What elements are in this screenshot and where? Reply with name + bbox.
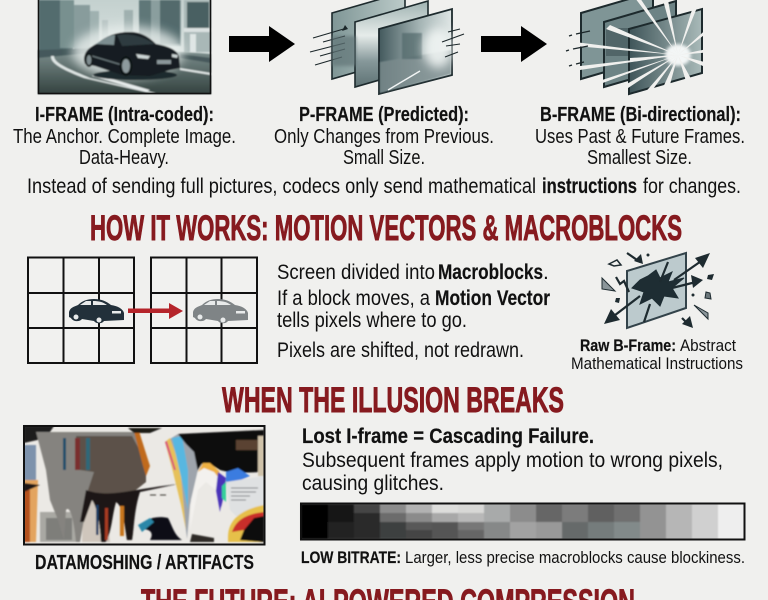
macroblock explanation: Screen divided into (277, 261, 435, 284)
datamoshing glitch image (24, 426, 264, 544)
P-frame caption: P-FRAME (Predicted): (299, 103, 469, 126)
summary line: instructions (542, 175, 637, 198)
low bitrate pixel bar (301, 504, 744, 539)
speed lines (310, 28, 464, 65)
I-frame caption (13, 103, 236, 169)
rainbow spike (165, 434, 198, 539)
summary line: for changes. (643, 175, 741, 198)
illusion breaks explanation: Subsequent frames apply motion to wrong pixels, (302, 449, 723, 472)
shards (575, 0, 712, 96)
macroblock explanation: Pixels are shifted, not redrawn. (277, 339, 524, 362)
P-frame caption (274, 103, 494, 169)
icon: ghost car (193, 299, 248, 323)
P-frame caption: Only Changes from Previous. (274, 125, 494, 148)
summary line: Instead of sending full pictures, codecs only send mathematical (27, 175, 536, 198)
macroblock explanation: If a block moves, a (277, 287, 430, 310)
icon: raw B-frame shatter (602, 253, 714, 328)
top-right black mass (178, 430, 264, 473)
illusion breaks explanation (302, 425, 723, 495)
arrow: motion vector (128, 303, 183, 319)
caption: raw B-frame: Abstract (680, 336, 736, 355)
macroblock grid: after (151, 257, 257, 363)
macroblock explanation (277, 261, 550, 362)
white peak with orange edge (190, 464, 222, 530)
B-frame caption (535, 103, 745, 169)
illusion breaks explanation: Lost I-frame = Cascading Failure. (302, 425, 594, 448)
illusion breaks explanation: causing glitches. (302, 472, 444, 495)
right text-like area (226, 476, 264, 520)
heading: illusion breaks: WHEN THE ILLUSION BREAKS (222, 380, 564, 420)
icon: car (69, 299, 124, 323)
pixel bar frame (301, 504, 744, 540)
P-frame middle panel (355, 1, 428, 87)
macroblock explanation: tells pixels where to go. (277, 309, 467, 332)
I-frame caption: The Anchor. Complete Image. (13, 125, 236, 148)
B-frame front panel (629, 9, 702, 94)
I-frame car photo (38, 0, 211, 94)
low bitrate caption: LOW BITRATE: (301, 549, 401, 567)
P-frame caption: Small Size. (343, 146, 425, 169)
P-frame back panel (332, 0, 405, 79)
macroblock explanation: Macroblocks (438, 261, 543, 284)
arrow: I to P (229, 26, 295, 62)
macroblock grid: before (28, 257, 134, 363)
P-frame front panel (379, 9, 453, 94)
macroblock explanation: . (543, 261, 549, 284)
caption: datamoshing: DATAMOSHING / ARTIFACTS (35, 552, 254, 574)
caption: raw B-frame: Mathematical Instructions (571, 354, 743, 373)
bottom-right rainbow (228, 505, 264, 542)
B-frame back panel (581, 0, 653, 79)
P-frame stacked panels (310, 0, 464, 94)
B-frame caption: Smallest Size. (587, 146, 692, 169)
arrow: P to B (481, 26, 547, 62)
B-frame shattered panels (566, 0, 712, 96)
caption: raw B-frame: Raw B-Frame: (580, 336, 676, 355)
caption: raw B-frame (571, 336, 743, 373)
blue-purple drip (216, 472, 226, 512)
car body (84, 32, 180, 76)
left side colour bars and gray mass (24, 445, 36, 480)
B-frame dashes (566, 31, 590, 66)
I-frame caption: I-FRAME (Intra-coded): (35, 103, 214, 126)
macroblock explanation: Motion Vector (435, 287, 550, 310)
B-frame middle panel (604, 1, 676, 87)
I-frame caption: Data-Heavy. (79, 146, 169, 169)
bottom black blobs (142, 517, 182, 540)
